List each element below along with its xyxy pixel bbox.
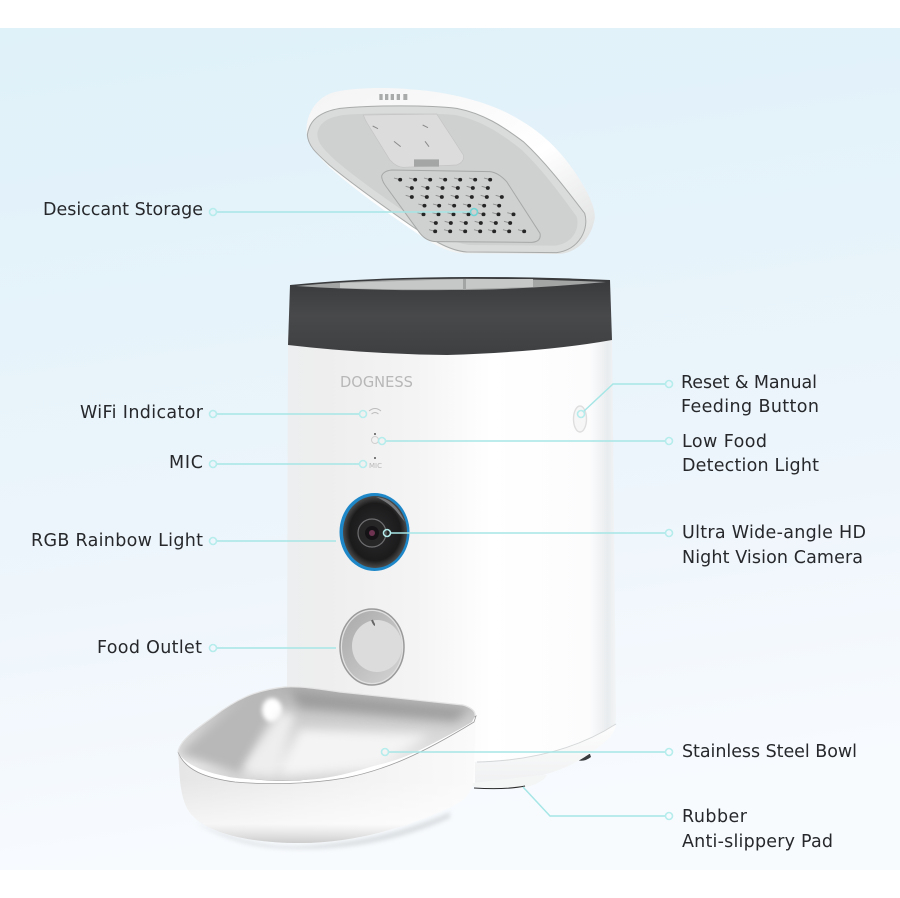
body shell <box>287 335 616 783</box>
steel corner highlight <box>262 698 282 722</box>
leader line <box>217 211 471 213</box>
indicator dot <box>374 433 376 435</box>
indicator icon <box>372 436 378 444</box>
text line 1: Ultra Wide-angle HD <box>682 523 866 543</box>
bowl <box>170 680 480 849</box>
rim band <box>288 277 612 355</box>
leader line <box>523 787 665 816</box>
steel rim edge <box>178 687 475 752</box>
label: Low Food Detection Light <box>378 432 819 476</box>
bowl shadow <box>195 812 450 849</box>
lid inner face <box>307 106 586 253</box>
label: Food Outlet <box>97 638 336 658</box>
vent hole tails <box>394 178 523 231</box>
steel left slope <box>179 704 268 776</box>
start dot <box>666 812 672 820</box>
end dot <box>384 530 390 536</box>
text line 1: Rubber <box>682 807 748 827</box>
bowl white lip <box>178 716 476 784</box>
text: Desiccant Storage <box>43 200 203 220</box>
leader line <box>385 440 665 442</box>
hinge latch <box>414 159 439 167</box>
outlet cavity <box>342 611 402 683</box>
leader line <box>390 532 665 534</box>
leader line <box>388 751 665 753</box>
text: WiFi Indicator <box>80 403 204 423</box>
label: MIC <box>169 453 366 473</box>
text line 1: Low Food <box>682 432 767 452</box>
text line 2: Anti-slippery Pad <box>682 832 833 852</box>
start dot <box>210 644 216 652</box>
start dot <box>210 208 216 216</box>
outlet ring <box>340 609 404 685</box>
leader line <box>583 384 665 412</box>
leader line <box>217 540 336 542</box>
hinge plate <box>363 114 464 167</box>
start dot <box>210 410 216 418</box>
steel corner streak <box>245 712 295 775</box>
flap notch <box>372 620 375 625</box>
leader line <box>217 413 360 415</box>
end dot <box>578 410 584 418</box>
back rubber foot <box>573 754 591 761</box>
start dot <box>210 460 216 468</box>
lens barrel <box>358 519 386 547</box>
light indicator <box>372 433 378 444</box>
mic dot <box>374 457 376 459</box>
label: WiFi Indicator <box>80 403 366 423</box>
text: Stainless Steel Bowl <box>682 742 857 762</box>
lid <box>307 88 595 254</box>
housing highlight <box>376 497 405 522</box>
vent holes <box>400 180 524 231</box>
feeder body <box>287 277 616 789</box>
outlet flap <box>352 620 402 672</box>
end dot <box>470 208 478 216</box>
bowl lower shading <box>178 716 476 843</box>
vent panel <box>382 170 540 242</box>
hopper rim <box>288 277 612 355</box>
label: Ultra Wide-angle HD Night Vision Camera <box>384 523 866 568</box>
end dot <box>360 460 366 468</box>
food outlet <box>340 609 404 685</box>
rubber pad <box>470 775 547 789</box>
text: RGB Rainbow Light <box>31 531 203 551</box>
brand logo: DOGNESS <box>340 373 413 391</box>
text line 2: Night Vision Camera <box>682 548 863 568</box>
mic text: MIC <box>369 462 382 470</box>
start dot <box>666 380 672 388</box>
label: Rubber Anti-slippery Pad <box>523 787 833 852</box>
lid outer shell <box>307 88 595 254</box>
leader line <box>217 463 360 465</box>
label: Desiccant Storage <box>43 200 478 220</box>
reset button <box>574 406 586 432</box>
start dot <box>666 438 672 444</box>
bowl outer shell <box>178 716 476 843</box>
plate marks <box>373 125 429 147</box>
lid vent slots <box>379 94 407 100</box>
camera housing <box>343 496 407 568</box>
icon: wifi <box>369 408 381 414</box>
end dot <box>382 748 388 756</box>
start dot <box>210 538 216 544</box>
lens glass <box>365 526 379 540</box>
body base shading <box>475 724 616 783</box>
pad dark edge <box>474 786 525 789</box>
text line 1: Reset & Manual <box>681 373 817 393</box>
lens reflection <box>369 530 375 536</box>
text: MIC <box>169 453 203 473</box>
lid recessed panel <box>317 113 577 246</box>
end dot <box>360 410 366 418</box>
RGB ring <box>340 493 410 571</box>
start dot <box>666 530 672 536</box>
pad disc <box>470 775 547 788</box>
opening highlights <box>340 279 533 289</box>
camera <box>340 493 410 571</box>
mic indicator <box>369 457 382 470</box>
text: Food Outlet <box>97 638 202 658</box>
steel base <box>178 687 475 780</box>
label: Stainless Steel Bowl <box>382 742 857 762</box>
label: Reset & Manual Feeding Button <box>578 373 819 418</box>
text line 2: Feeding Button <box>681 397 819 417</box>
end dot <box>378 438 386 444</box>
label: RGB Rainbow Light <box>31 531 336 551</box>
text line 2: Detection Light <box>682 456 819 476</box>
start dot <box>666 748 672 756</box>
steel interior <box>178 687 475 780</box>
body seam <box>477 724 616 762</box>
steel floor highlight <box>280 730 430 775</box>
hopper opening <box>296 279 606 290</box>
leader line <box>217 647 336 649</box>
steel back shadow <box>290 690 470 722</box>
